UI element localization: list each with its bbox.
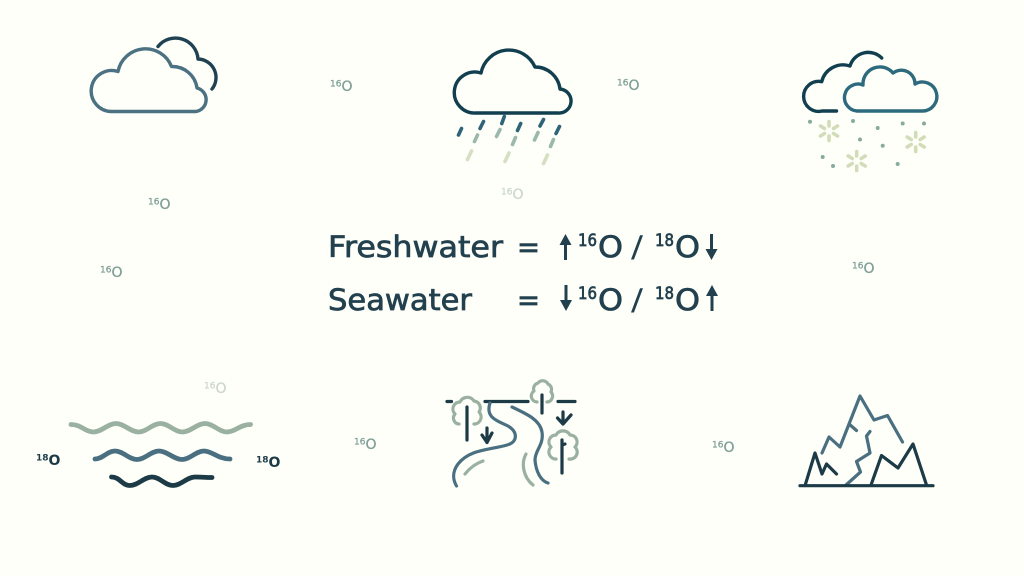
equation: seawater: Seawater (328, 283, 472, 317)
equation: freshwater: = (517, 230, 540, 264)
equation: freshwater: Freshwater (328, 230, 503, 264)
label 16O: 16 (100, 266, 112, 276)
label 16O: 16 (330, 80, 342, 90)
icon: snow clouds with snowflakes (804, 52, 937, 170)
snowflake bottom (848, 152, 865, 170)
label 16O: 16 (617, 78, 629, 88)
ground line (447, 400, 575, 403)
label 16O: O (863, 261, 874, 277)
label 16O: O (628, 78, 639, 94)
equation: freshwater: / (631, 230, 643, 264)
wave middle (95, 451, 230, 460)
label 18O left: 18 (36, 454, 49, 464)
label 16O: O (365, 437, 376, 453)
label 16O: 16 (354, 438, 366, 448)
equations (328, 230, 718, 317)
label 16O faded: O (512, 187, 523, 203)
wave top (71, 424, 250, 432)
icon: rivers and trees (447, 381, 577, 486)
equation: seawater: 18 (655, 284, 674, 304)
tree foliage (453, 397, 481, 424)
down arrows (482, 412, 571, 442)
river main (454, 403, 515, 486)
main mountain (822, 396, 902, 485)
label 18O right: 18 (256, 456, 269, 466)
label 16O faded: 16 (204, 382, 216, 392)
icon: rain cloud with rain streaks (454, 50, 571, 164)
icon: ocean waves (71, 424, 250, 486)
isotope labels: drifting 16O (100, 78, 874, 456)
icon: mountains (800, 396, 933, 486)
equation: freshwater: 18 (655, 231, 674, 251)
equation: seawater: O (675, 283, 700, 317)
snowflake left (820, 122, 838, 140)
snowflake right (907, 132, 924, 152)
equation: seawater (328, 283, 718, 317)
foreground peaks (800, 444, 933, 486)
equation: seawater: O (598, 283, 623, 317)
label 16O faded: 16 (501, 188, 513, 198)
label 16O: O (111, 265, 122, 281)
label 16O: O (341, 79, 352, 95)
tree trunks (467, 395, 565, 473)
label 16O: 16 (852, 262, 864, 272)
equation: freshwater (328, 230, 718, 264)
label 16O faded: O (215, 381, 226, 397)
label 18O left: O (49, 453, 61, 469)
equation: freshwater: O (598, 230, 623, 264)
icon: partly cloudy, two clouds (91, 38, 216, 112)
rain: dark row (458, 116, 560, 135)
label 18O right: O (269, 455, 281, 471)
rain: pale row (468, 151, 548, 164)
label 16O: O (159, 197, 170, 213)
equation: freshwater: O (675, 230, 700, 264)
equation: seawater: 16 (578, 284, 597, 304)
label 16O: O (723, 440, 734, 456)
river pale banks (465, 454, 533, 485)
equation: seawater: / (631, 283, 643, 317)
label 16O: 16 (148, 198, 160, 208)
equation: seawater: = (517, 283, 540, 317)
rain: sage row (474, 130, 554, 146)
river second (512, 407, 548, 483)
label 16O: 16 (712, 440, 724, 450)
equation: freshwater: 16 (578, 231, 597, 251)
snow dots (808, 119, 926, 168)
wave bottom (112, 477, 212, 486)
